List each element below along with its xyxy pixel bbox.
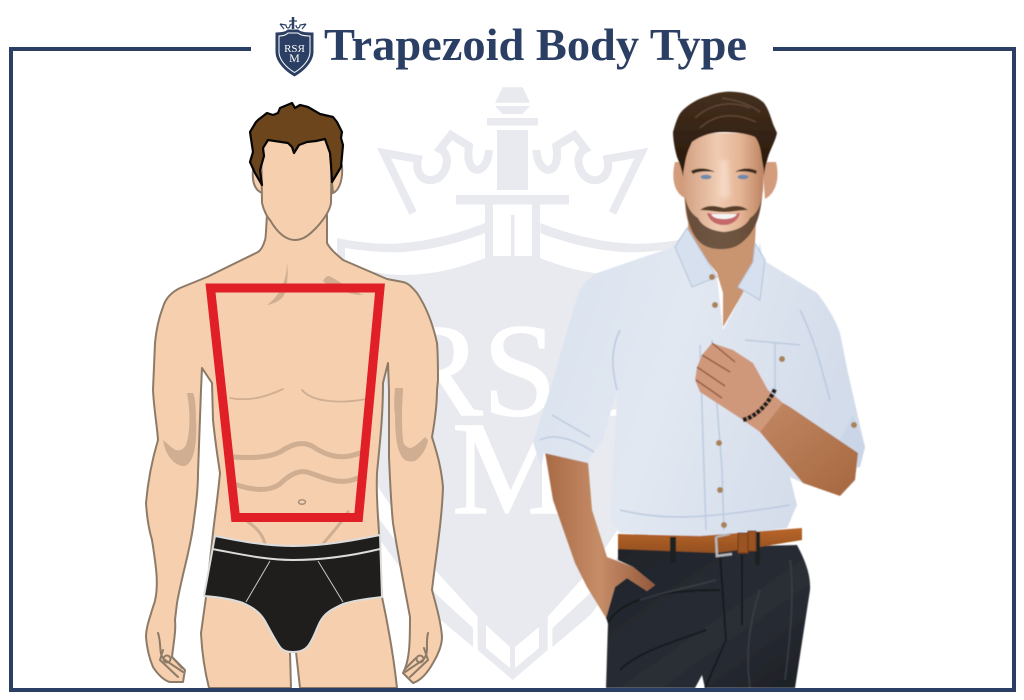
muscle shading [163, 262, 428, 544]
trousers [606, 545, 810, 688]
eyes and brows [691, 168, 757, 179]
briefs [204, 535, 382, 652]
title: Trapezoid Body Type [324, 19, 747, 70]
hair [250, 103, 343, 185]
bracelet [743, 389, 775, 420]
chest hand [695, 343, 783, 432]
watermark initials: M [452, 394, 570, 542]
watermark initials: RSЯ [394, 296, 645, 444]
nose highlight [719, 160, 730, 198]
watermark chevrons [486, 625, 539, 668]
watermark initials [394, 296, 645, 542]
face [684, 133, 763, 249]
photo: smiling man in shirt and belt [533, 92, 865, 688]
ears [673, 162, 778, 199]
face [261, 130, 332, 240]
watermark shield body [347, 256, 678, 680]
title header [276, 17, 747, 76]
logo initials: M [289, 51, 300, 65]
logo initials: RSЯ [284, 43, 306, 55]
watermark shield band [337, 223, 688, 647]
beard [685, 196, 762, 249]
illustrated male figure [146, 103, 443, 688]
hands [158, 633, 428, 677]
logo shield [276, 30, 313, 76]
collar [675, 228, 765, 300]
right forearm [745, 403, 858, 496]
logo initials [284, 43, 306, 65]
mouth [707, 213, 740, 225]
moustache [700, 206, 748, 212]
watermark: shield logo [337, 87, 688, 680]
ears [253, 166, 342, 193]
red trapezoid outline [210, 288, 380, 518]
watermark sword [456, 87, 569, 256]
logo badge [276, 17, 313, 76]
hair [673, 92, 777, 177]
head [250, 103, 343, 240]
shirt [533, 228, 865, 537]
body silhouette [146, 215, 443, 688]
logo crown [280, 17, 306, 29]
neck [688, 222, 756, 327]
watermark crown [384, 135, 641, 213]
shirt buttons [709, 274, 857, 528]
belt [618, 528, 802, 565]
left forearm and hand [545, 452, 655, 618]
